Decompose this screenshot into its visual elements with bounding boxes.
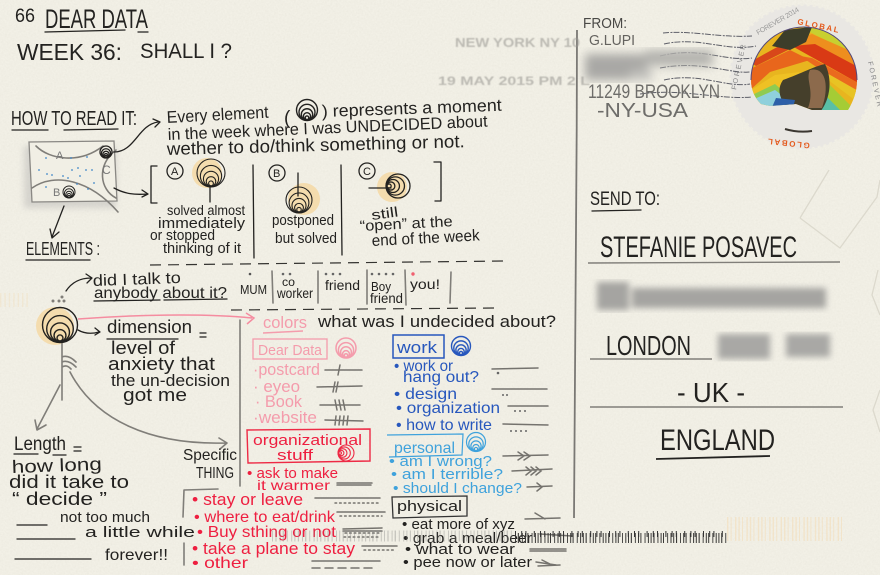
panel: personal category: • am I terrible? bbox=[391, 466, 503, 483]
panel: organizational stuff category: it warmer bbox=[257, 477, 330, 493]
panel: type B postponed: postponed bbox=[272, 212, 334, 229]
panel: work category: • organization bbox=[396, 400, 500, 417]
panel: type C open: still bbox=[370, 203, 399, 223]
title bbox=[15, 4, 232, 65]
divider: postcard centre line bbox=[574, 30, 577, 518]
postmark: text: NEW YORK NY 10 bbox=[455, 35, 580, 50]
panel: work category bbox=[393, 335, 500, 434]
section: how to read it heading: HOW TO READ IT: bbox=[11, 108, 137, 130]
text: length definition: Length bbox=[14, 434, 66, 455]
icon: spiral C with stem bbox=[369, 174, 410, 198]
icon: pink spiral bbox=[336, 338, 356, 358]
panel: type A solved: or stopped bbox=[150, 227, 215, 244]
text: length definition: a little while bbox=[85, 524, 195, 541]
panel: physical category: • grab a meal/beer bbox=[403, 530, 532, 547]
text: specific thing: Specific bbox=[183, 447, 237, 464]
diagram: postcard map: A bbox=[56, 150, 64, 162]
postmark: text: 19 MAY 2015 PM 2 L bbox=[438, 74, 590, 88]
marks: physical lines bbox=[525, 513, 572, 566]
stamp: GLOBAL bbox=[797, 17, 840, 35]
arrow: map to elements bbox=[50, 206, 64, 238]
panel: did I talk to anybody bbox=[52, 270, 451, 306]
recipient: UK: - UK - bbox=[677, 377, 745, 408]
panel: Dear Data category: · Book bbox=[255, 392, 302, 411]
sender address: 11249 BROOKLYN bbox=[588, 82, 720, 103]
recipient: blurred street bbox=[597, 282, 826, 310]
sender address: -NY-USA bbox=[597, 100, 689, 122]
panel: type B postponed: B bbox=[273, 168, 280, 180]
postmark: cancel waves bbox=[640, 32, 756, 97]
text: length definition: forever!! bbox=[105, 547, 168, 564]
panel: organizational stuff category: • ask to make bbox=[247, 465, 338, 482]
panel: did I talk to anybody: friend bbox=[370, 290, 403, 306]
panel: type B postponed bbox=[269, 165, 337, 247]
panel: type C open bbox=[359, 163, 481, 250]
list: red decisions bbox=[192, 490, 356, 572]
panel: Dear Data category: ·website bbox=[253, 408, 317, 427]
marks: red ticks bbox=[335, 503, 396, 550]
arrow: map to types bbox=[114, 188, 148, 197]
panel: organizational stuff category bbox=[247, 429, 370, 493]
text: length definition: did it take to bbox=[9, 472, 129, 492]
sender address: G.LUPI bbox=[589, 32, 635, 49]
icon: red spiral bbox=[338, 445, 354, 461]
panel: type A solved bbox=[150, 158, 246, 257]
stamp bbox=[731, 6, 880, 150]
tape marks bbox=[800, 170, 880, 432]
icon: spiral B with stem bbox=[286, 173, 312, 213]
text: dimension definition: the un-decision bbox=[111, 371, 230, 390]
panel: did I talk to anybody: you! bbox=[410, 276, 440, 292]
recipient: send to: SEND TO: bbox=[590, 189, 660, 210]
panel: Dear Data category: Dear Data bbox=[258, 342, 323, 359]
panel: type C open: “open” at the bbox=[359, 213, 453, 235]
recipient: England: ENGLAND bbox=[660, 424, 775, 457]
diagram: postcard map: C bbox=[102, 163, 111, 177]
text: elements label: ELEMENTS : bbox=[26, 239, 100, 259]
marks: personal arrows bbox=[503, 452, 552, 491]
icon: spiral A with stem bbox=[197, 159, 225, 202]
icon: light blue spiral bbox=[466, 432, 486, 452]
title: WEEK 36: bbox=[17, 39, 122, 65]
text: length definition: how long bbox=[11, 454, 102, 477]
panel: work category: • design bbox=[394, 386, 457, 403]
icon: spiral C in map bbox=[100, 146, 112, 158]
panel: organizational stuff category: stuff bbox=[277, 447, 314, 464]
text: explanation: ) represents a moment bbox=[321, 96, 502, 121]
panel: type A solved: immediately bbox=[158, 215, 246, 232]
list: red decisions: • stay or leave bbox=[192, 490, 303, 509]
legend: colors heading: colors bbox=[263, 313, 307, 332]
title: SHALL I ? bbox=[140, 40, 232, 63]
text: explanation: Every element bbox=[166, 103, 269, 127]
panel: type A solved: solved almost bbox=[167, 202, 245, 218]
list: red decisions: • take a plane to stay bbox=[192, 539, 356, 558]
icon: blue spiral bbox=[452, 336, 470, 356]
sender address: FROM: bbox=[583, 15, 627, 32]
bracket: right bbox=[434, 162, 441, 201]
panel: Dear Data category bbox=[253, 338, 356, 427]
stamp: FOREVER 2014 bbox=[756, 7, 801, 37]
panel: did I talk to anybody: worker bbox=[276, 285, 313, 301]
list: red decisions: • where to eat/drink bbox=[194, 509, 336, 526]
text: dimension definition: level of bbox=[111, 338, 176, 358]
panel: type A solved: thinking of it bbox=[163, 240, 242, 257]
blurred address bbox=[585, 50, 713, 80]
diagram: postcard map bbox=[24, 141, 118, 212]
text: length definition: not too much bbox=[60, 509, 150, 526]
panel: did I talk to anybody: anybody about it? bbox=[94, 285, 227, 302]
text: dimension definition bbox=[107, 317, 230, 405]
stamp: FOREVER bbox=[731, 44, 748, 90]
panel: personal category: • should I change? bbox=[393, 480, 522, 497]
text: specific thing bbox=[183, 447, 237, 565]
panel: physical category: • pee now or later bbox=[403, 554, 532, 571]
icon: big spiral with stem bbox=[36, 307, 78, 400]
panel: did I talk to anybody: co bbox=[282, 275, 295, 289]
text: specific thing: THING bbox=[196, 465, 234, 482]
marks: red lines bbox=[312, 483, 397, 561]
panel: personal category bbox=[387, 432, 522, 497]
arrow: to colors bbox=[78, 313, 254, 324]
blurred postcode bbox=[718, 334, 830, 359]
text: length definition bbox=[9, 434, 195, 564]
panel: work category: • how to write bbox=[396, 417, 492, 434]
panel: type A solved: A bbox=[171, 166, 179, 178]
barcode: faint show-through bbox=[0, 293, 28, 307]
list: red decisions: • Buy sthing or not bbox=[197, 524, 337, 541]
arrow: to dimension bbox=[78, 328, 100, 335]
panel: organizational stuff category: organizational bbox=[253, 432, 362, 449]
panel: did I talk to anybody: did I talk to bbox=[93, 270, 181, 290]
barcode: printed ticks bbox=[272, 529, 842, 538]
text: explanation: in the week where I was UNDECIDED about bbox=[167, 113, 488, 144]
arrow: to specific thing bbox=[70, 372, 227, 449]
panel: Dear Data category: · eyeo bbox=[253, 377, 300, 396]
text: dimension definition: anxiety that bbox=[108, 354, 215, 374]
recipient: city: LONDON bbox=[606, 330, 691, 361]
text: length definition: “ decide ” bbox=[12, 489, 107, 509]
sender address bbox=[583, 15, 720, 122]
marks: work lines bbox=[492, 368, 548, 425]
icon: spiral B in map bbox=[63, 186, 75, 198]
recipient: city bbox=[590, 330, 830, 361]
panel: Dear Data category: ·postcard bbox=[253, 360, 320, 379]
panel: personal category: • am I wrong? bbox=[389, 453, 492, 470]
marks: Dear Data lines bbox=[317, 365, 363, 425]
title: 66 bbox=[15, 6, 35, 27]
panel: did I talk to anybody: Boy bbox=[371, 279, 391, 294]
list: red decisions: • other bbox=[192, 555, 249, 572]
panel: type C open: end of the week bbox=[371, 227, 481, 250]
stamp: GLOBAL bbox=[767, 137, 810, 150]
title: DEAR DATA bbox=[45, 4, 148, 34]
text: dimension definition: got me bbox=[123, 385, 187, 405]
panel: type B postponed: but solved bbox=[275, 230, 337, 247]
divider dashed line bbox=[150, 261, 505, 265]
bracket: left bbox=[151, 166, 157, 203]
arrow: talk bbox=[66, 274, 92, 291]
marks: work dots bbox=[497, 372, 527, 432]
panel: work category: hang out? bbox=[403, 369, 479, 386]
stamp globe bbox=[751, 28, 857, 110]
panel: physical category bbox=[392, 496, 532, 571]
icon: talk dots bbox=[52, 296, 66, 302]
text: explanation bbox=[166, 96, 502, 159]
diagram: postcard map: B bbox=[53, 187, 60, 199]
arrow: element to explanation bbox=[114, 119, 160, 152]
panel: did I talk to anybody: friend bbox=[325, 277, 360, 293]
panel: physical category: • what to wear bbox=[405, 541, 515, 558]
text: explanation: ( bbox=[284, 108, 291, 129]
divider dashed line two bbox=[231, 308, 495, 310]
panel: did I talk to anybody: MUM bbox=[240, 282, 267, 297]
panel: physical category: physical bbox=[397, 498, 462, 515]
panel: work category: work bbox=[396, 338, 438, 357]
text: dimension definition: dimension bbox=[107, 317, 192, 337]
text: elements label bbox=[26, 239, 100, 260]
icon: inline spiral bbox=[296, 100, 318, 120]
panel: personal category: personal bbox=[394, 440, 455, 457]
panel: physical category: • eat more of xyz bbox=[402, 516, 515, 533]
text: explanation: wether to do/think something or not. bbox=[166, 131, 465, 159]
panel: type C open: C bbox=[363, 166, 371, 178]
panel: work category: • work or bbox=[394, 358, 454, 375]
legend: colors heading bbox=[263, 312, 556, 333]
postmark: text bbox=[438, 35, 590, 88]
legend: colors heading: what was I undecided about? bbox=[317, 312, 556, 331]
divider vertical bbox=[239, 320, 241, 486]
arrow: to length bbox=[35, 385, 60, 430]
